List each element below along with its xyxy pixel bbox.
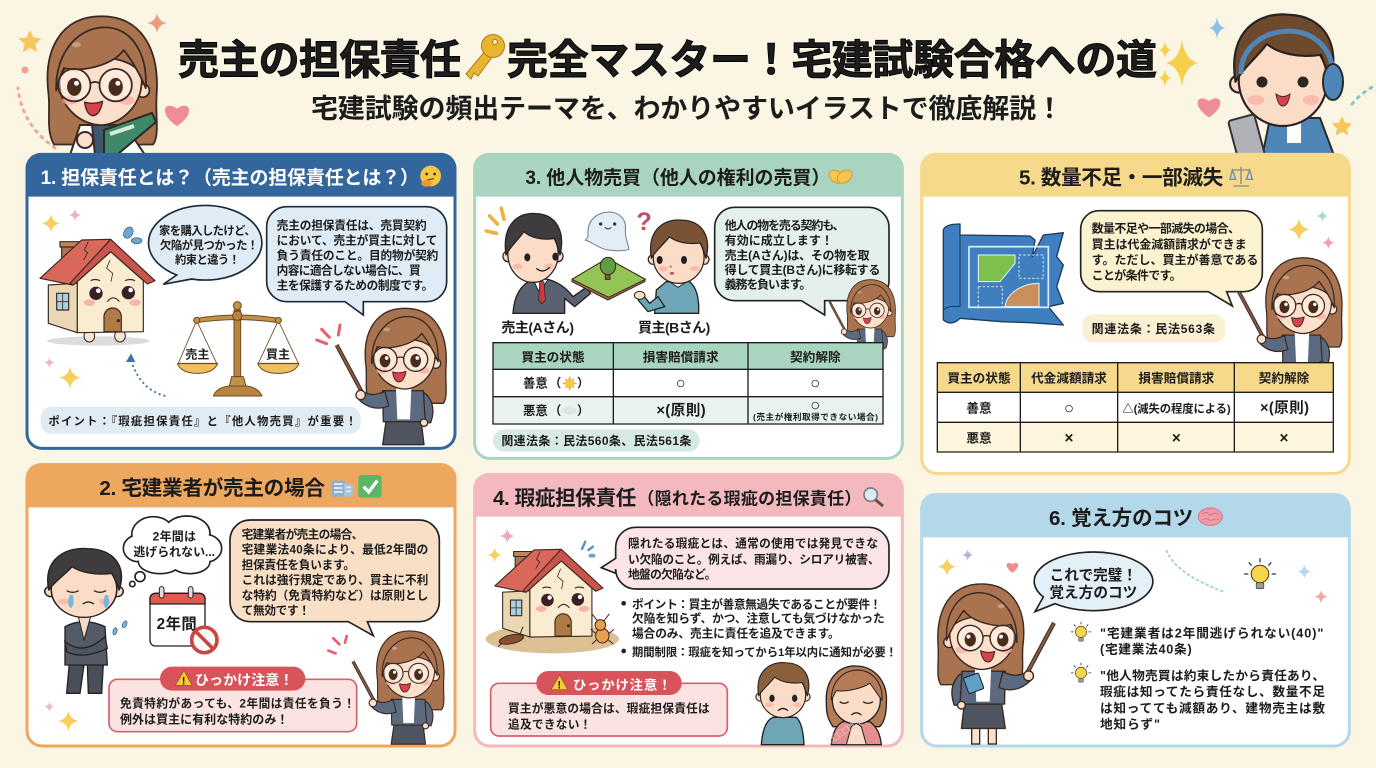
- panel frame: [473, 153, 904, 458]
- icon: scales: [1230, 167, 1252, 186]
- table: buyer state vs remedies: 善意: [523, 375, 548, 390]
- memory tip 1: [1100, 625, 1323, 656]
- memory tip 2: [1100, 668, 1325, 732]
- icon: thinking face: [420, 166, 441, 187]
- icon: key: [466, 34, 504, 79]
- label: seller A: 売主(Aさん): [501, 320, 574, 336]
- warning callout: ひっかけ注意！: [195, 672, 293, 688]
- warning callout: !: [182, 675, 185, 687]
- law reference pill: 関連法条：民法560条、民法561条: [501, 433, 691, 448]
- icon: brain: [1198, 508, 1222, 525]
- speech bubble: mastery: [1034, 552, 1153, 612]
- speech bubble: price reduction: す。ただし、買主が善意である: [1092, 252, 1258, 267]
- warning callout: 買主が悪意の場合は、瑕疵担保責任は: [508, 702, 710, 716]
- table: remedies: 契約解除: [1259, 371, 1310, 386]
- warning callout: [109, 667, 357, 732]
- speech bubble: buyer complaint: [149, 205, 262, 284]
- law reference pill: [493, 429, 700, 452]
- speech bubble: contract is valid: 得して買主(Bさん)に移転する: [725, 262, 880, 277]
- speech bubble: 2-year rule: [230, 520, 439, 636]
- memory tip 2: 瑕疵は知ってたら責任なし、数量不足: [1100, 684, 1325, 699]
- character: worried boy: [756, 663, 810, 745]
- table: remedies: ×: [1280, 430, 1289, 447]
- speech bubble: contract is valid: 有効に成立します！: [725, 232, 833, 247]
- table: remedies: 損害賠償請求: [1138, 371, 1215, 386]
- character: teacher: [328, 631, 444, 744]
- icons: left header decoration: [18, 13, 189, 126]
- character: worried man: [45, 548, 128, 693]
- icon: tip bulb 2: [1071, 663, 1091, 682]
- table: remedies: 代金減額請求: [1031, 371, 1107, 386]
- warning callout: !: [558, 680, 561, 692]
- speech bubble: 2-year rule: 宅建業法40条により、最低2年間の: [242, 543, 428, 557]
- sparkles: [488, 529, 515, 562]
- icon: tip bulb 1: [1071, 622, 1091, 641]
- speech bubble: price reduction: 買主は代金減額請求ができま: [1092, 236, 1247, 251]
- memory tip 1: (宅建業法40条): [1100, 641, 1192, 656]
- warning callout: [491, 671, 727, 736]
- label: buyer B: 買主(Bさん): [638, 320, 710, 336]
- table: buyer state vs remedies: ）: [577, 376, 589, 390]
- character: teacher: [1239, 258, 1342, 386]
- bullet list: ポイント：買主が善意無過失であることが要件！: [632, 597, 881, 611]
- icons: right header decoration: [1198, 17, 1376, 136]
- sparkles: [1288, 210, 1335, 249]
- table: buyer state vs remedies: ○: [810, 374, 820, 393]
- panel 4: hidden defect warranty: [473, 473, 904, 747]
- icon: calendar with prohibition sign: 2年間: [157, 615, 197, 633]
- scale label: seller: 売主: [185, 347, 209, 362]
- icon: office building: [332, 481, 353, 497]
- table: buyer state vs remedies: 悪意: [523, 403, 548, 418]
- law reference pill: [1083, 314, 1225, 342]
- speech bubble: definition: 主を保護するための制度です。: [277, 278, 433, 292]
- heading: 6. 覚え方のコツ: [1049, 507, 1193, 530]
- bullet list: 場合のみ、売主に責任を追及できます。: [632, 626, 840, 640]
- emphasis marks: [486, 208, 504, 233]
- speech bubble: 2-year rule: な特約（免責特約など）は原則とし: [242, 588, 428, 602]
- memory tip 2: 地知らず": [1100, 717, 1160, 732]
- table: remedies: 悪意: [966, 430, 992, 445]
- watermark: □□□□□□□: [825, 714, 867, 747]
- table: remedies: 買主の状態: [947, 371, 1011, 386]
- table: remedies: ×: [1065, 430, 1074, 447]
- table: remedies: ×: [1172, 430, 1181, 447]
- speech bubble: buyer complaint: 約束と違う！: [175, 252, 240, 266]
- table: buyer state vs remedies: 買主の状態: [521, 349, 585, 364]
- speech bubble: hidden defect definition: [601, 527, 889, 589]
- point pill: [41, 407, 361, 434]
- illustration: land parcel with tree: [572, 257, 645, 300]
- speech bubble: hidden defect definition: い欠陥のこと。例えば、雨漏り、シロアリ被害、: [628, 552, 880, 566]
- thought bubble: 逃げられない...: [133, 544, 215, 559]
- illustration: torn blueprint: [943, 224, 1063, 325]
- table: buyer state vs remedies: (売主が権利取得できない場合): [753, 411, 878, 422]
- heading: 1. 担保責任とは？（売主の担保責任とは？）: [41, 166, 419, 189]
- panel frame: [26, 153, 456, 448]
- table: buyer state vs remedies: [493, 343, 883, 424]
- heading: 4. 瑕疵担保責任: [493, 487, 636, 510]
- character: seller A: [503, 213, 591, 313]
- speech bubble: hidden defect definition: 隠れたる瑕疵とは、通常の使用では発見できな: [628, 536, 878, 550]
- panel 1: what is seller warranty: [26, 153, 456, 448]
- illustration: house with termites: [486, 542, 619, 653]
- thought bubble: [123, 516, 222, 587]
- warning callout: 追及できない！: [508, 717, 591, 731]
- character: boy with headphones and tablet: [1228, 14, 1343, 162]
- icon: sun: [559, 373, 580, 394]
- illustration: balance scale: [177, 302, 299, 396]
- speech bubble: contract is valid: 義務を負います。: [725, 277, 811, 292]
- speech bubble: contract is valid: 売主(Aさん)は、その物を取: [725, 247, 870, 262]
- table: remedies: ○: [1064, 399, 1074, 418]
- panel frame: [473, 473, 904, 746]
- scale label: buyer: 買主: [266, 347, 290, 362]
- speech bubble: definition: 売主の担保責任は、売買契約: [277, 218, 427, 232]
- character: teacher: [317, 308, 446, 445]
- speech bubble: mastery: これで完璧！: [1050, 566, 1137, 584]
- dotted decoration: [1167, 551, 1223, 592]
- warning callout: 例外は買主に有利な特約のみ！: [120, 711, 288, 726]
- heading: 2. 宅建業者が売主の場合: [99, 476, 325, 500]
- law reference pill: 関連法条：民法563条: [1092, 321, 1215, 336]
- speech bubble: definition: において、売主が買主に対して: [277, 233, 437, 247]
- table: buyer state vs remedies: ）: [577, 404, 589, 418]
- panel 5: quantity shortage and partial loss: [920, 153, 1351, 473]
- table: remedies: △(減失の程度による): [1122, 402, 1231, 416]
- table: remedies: ×(原則): [1260, 400, 1309, 417]
- bullet list: 欠陥を知らず、かつ、注意しても気づけなかった: [632, 612, 885, 626]
- speech bubble: contract is valid: 他人の物を売る契約も、: [725, 217, 845, 232]
- warning callout: 免責特約があっても、2年間は責任を負う！: [120, 696, 355, 710]
- memory tip 1: "宅建業者は2年間逃げられない(40)": [1100, 625, 1323, 640]
- speech bubble: price reduction: [1081, 211, 1262, 306]
- table: buyer state vs remedies: 損害賠償請求: [643, 349, 719, 364]
- speech bubble: buyer complaint: 家を購入したけど、: [159, 223, 256, 237]
- bullet list: [621, 597, 897, 659]
- point pill: ポイント：『瑕疵担保責任』と『他人物売買』が重要！: [48, 414, 357, 428]
- speech bubble: definition: 内容に適合しない場合に、買: [277, 263, 421, 277]
- sparkles: [44, 702, 79, 731]
- character: teacher with book: [938, 584, 1054, 744]
- panel 6: memory tips: [920, 493, 1351, 746]
- speech bubble: contract is valid: [715, 207, 889, 315]
- subtitle: 宅建試験の頻出テーマを、わかりやすいイラストで徹底解説！: [311, 94, 1063, 124]
- panel 3: sale of another's property: [473, 153, 904, 458]
- character: woman with book: [18, 16, 157, 155]
- table: buyer state vs remedies: （: [549, 376, 561, 390]
- sparkles and heart: [938, 549, 1328, 603]
- character: teacher: [830, 280, 895, 361]
- character: crying woman: [826, 666, 886, 745]
- speech bubble: definition: 負う責任のこと。目的物が契約: [277, 248, 439, 262]
- table: buyer state vs remedies: （: [549, 404, 561, 418]
- icon: sparkles: [1159, 39, 1198, 87]
- title continued: 完全マスター！宅建試験合格への道: [507, 37, 1157, 83]
- illustration: sad cracked house: [40, 225, 155, 346]
- bullet list: 期間制限：瑕疵を知ってから1年以内に通知が必要！: [632, 645, 897, 659]
- speech bubble: 2-year rule: これは強行規定であり、買主に不利: [242, 573, 428, 587]
- icon: magnifier: [864, 488, 883, 506]
- speech bubble: 2-year rule: て無効です！: [242, 603, 310, 617]
- memory tip 2: は知ってても減額あり、建物売主は敷: [1100, 701, 1325, 716]
- sparkles: [42, 209, 81, 389]
- speech bubble: price reduction: ことが条件です。: [1092, 267, 1182, 282]
- speech bubble: 2-year rule: 宅建業者が売主の場合、: [242, 527, 363, 541]
- speech bubble: price reduction: 数量不足や一部滅失の場合、: [1092, 221, 1240, 236]
- icon: check mark: [358, 475, 382, 498]
- heading: 3. 他人物売買（他人の権利の売買）: [525, 167, 830, 189]
- icon: calendar with prohibition sign: [150, 587, 217, 653]
- table: buyer state vs remedies: ×(原則): [656, 402, 706, 419]
- character: buyer B: [634, 220, 709, 313]
- icon: handshake: [827, 167, 854, 186]
- table: buyer state vs remedies: 契約解除: [790, 349, 841, 364]
- icon: ghost: [585, 212, 629, 251]
- title: 売主の担保責任: [178, 37, 461, 83]
- icon: cloud: [562, 407, 577, 415]
- heading: 5. 数量不足・一部滅失: [1019, 165, 1224, 189]
- memory tip 2: "他人物売買は約束したから責任あり、: [1100, 668, 1325, 683]
- table: remedies: 善意: [966, 401, 992, 416]
- speech bubble: buyer complaint: 欠陥が見つかった！: [160, 238, 258, 252]
- table: buyer state vs remedies: ○: [676, 374, 686, 393]
- thought bubble: 2年間は: [153, 529, 196, 544]
- speech bubble: 2-year rule: 担保責任を負います。: [242, 558, 355, 572]
- icon: light bulb: [1244, 558, 1276, 589]
- question mark: ?: [636, 208, 652, 236]
- speech bubble: mastery: 覚え方のコツ: [1049, 583, 1137, 601]
- heading: parenthetical: （隠れたる瑕疵の担保責任）: [637, 489, 861, 508]
- table: remedies: [937, 363, 1333, 452]
- panel frame: [26, 463, 456, 746]
- panel frame: [920, 153, 1351, 473]
- dotted arrow: [126, 353, 165, 396]
- warning callout: ひっかけ注意！: [573, 676, 671, 692]
- table: buyer state vs remedies: ○: [810, 396, 820, 415]
- speech bubble: definition: [267, 207, 447, 315]
- panel frame: [920, 493, 1351, 746]
- panel 2: licensed dealer as seller: [26, 463, 456, 746]
- speech bubble: hidden defect definition: 地盤の欠陥など。: [628, 567, 716, 581]
